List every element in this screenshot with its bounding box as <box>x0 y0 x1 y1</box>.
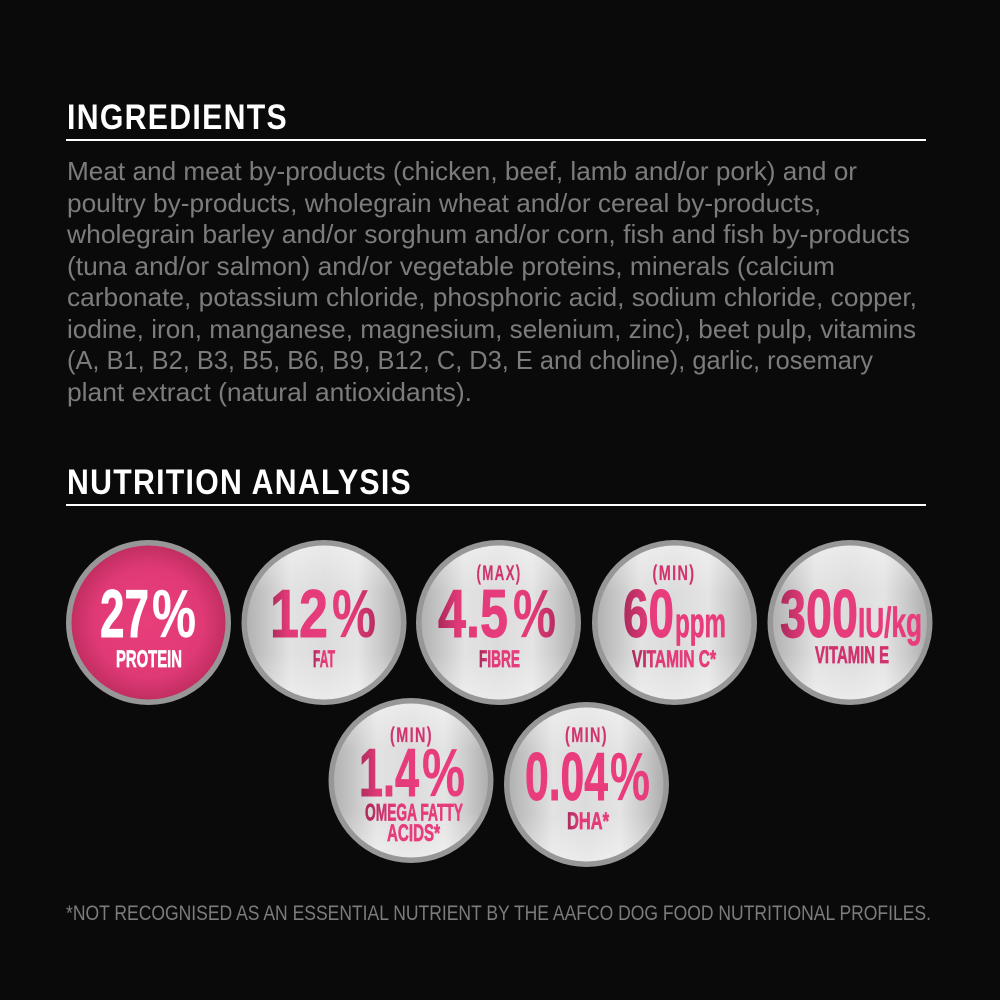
text block: ingredients list: (A, B1, B2, B3, B5, B6, B9, B12, C, D3, E and choline), garlic, rosemary <box>67 345 873 375</box>
badge: 12% fat: % <box>332 576 376 652</box>
badge: 0.04% DHA: % <box>610 739 650 815</box>
text block: ingredients list: poultry by-products, wholegrain wheat and/or cereal by-products, <box>67 188 821 218</box>
badge: 4.5% fibre: FIBRE <box>479 646 520 673</box>
badge: 0.04% DHA: 0.04 <box>525 739 608 815</box>
badge: 300 IU/kg vitamin E: VITAMIN E <box>815 642 889 669</box>
badge: 27% protein: PROTEIN <box>116 646 182 673</box>
badge: 1.4% omega fatty acids: % <box>422 735 465 811</box>
badge: 1.4% omega fatty acids: 1.4 <box>359 735 419 811</box>
badge: 60ppm vitamin C: VITAMIN C* <box>632 646 716 673</box>
badge: 300 IU/kg vitamin E: 300 <box>780 576 858 652</box>
badge: 60ppm vitamin C <box>592 540 757 705</box>
badge: 1.4% omega fatty acids <box>328 698 494 863</box>
badge: 60ppm vitamin C: ppm <box>675 599 726 646</box>
badge: 300 IU/kg vitamin E: IU/kg <box>858 599 922 646</box>
badge: 27% protein: 27 <box>100 576 149 652</box>
badge: 60ppm vitamin C: (MIN) <box>652 562 696 585</box>
badge: 0.04% DHA: DHA* <box>567 808 609 835</box>
badge: 60ppm vitamin C: 60 <box>623 576 674 652</box>
heading: nutrition analysis: NUTRITION ANALYSIS <box>67 463 412 502</box>
text block: ingredients list: carbonate, potassium chloride, phosphoric acid, sodium chloride, copper, <box>67 282 917 312</box>
text block: ingredients list: wholegrain barley and/or sorghum and/or corn, fish and fish by-products <box>66 219 910 249</box>
badge: 1.4% omega fatty acids: (MIN) <box>390 724 433 747</box>
badge: 0.04% DHA: (MIN) <box>565 724 608 747</box>
badge: 0.04% DHA <box>504 702 669 867</box>
text block: ingredients list: (tuna and/or salmon) and/or vegetable proteins, minerals (calcium <box>67 251 835 281</box>
badge: 4.5% fibre <box>416 540 581 705</box>
badge: 4.5% fibre: 4.5 <box>438 576 508 652</box>
heading: ingredients: INGREDIENTS <box>67 98 288 137</box>
badge: 300 IU/kg vitamin E <box>768 540 932 705</box>
text block: ingredients list <box>66 156 917 407</box>
text block: ingredients list: iodine, iron, manganese, magnesium, selenium, zinc), beet pulp, vitamins <box>67 314 916 344</box>
badge: 27% protein <box>66 540 231 705</box>
text block: ingredients list: plant extract (natural antioxidants). <box>67 377 472 407</box>
badge: 27% protein: % <box>152 576 196 652</box>
badge: 12% fat: 12 <box>270 576 328 652</box>
badge: 12% fat: FAT <box>313 646 335 673</box>
text block: ingredients list: Meat and meat by-products (chicken, beef, lamb and/or pork) and or <box>67 156 857 186</box>
badge: 4.5% fibre: % <box>513 576 556 652</box>
badge: 4.5% fibre: (MAX) <box>476 562 522 585</box>
badge: 12% fat <box>242 540 406 705</box>
badge: 1.4% omega fatty acids: ACIDS* <box>387 820 440 847</box>
badge: 1.4% omega fatty acids: OMEGA FATTY <box>365 800 463 826</box>
